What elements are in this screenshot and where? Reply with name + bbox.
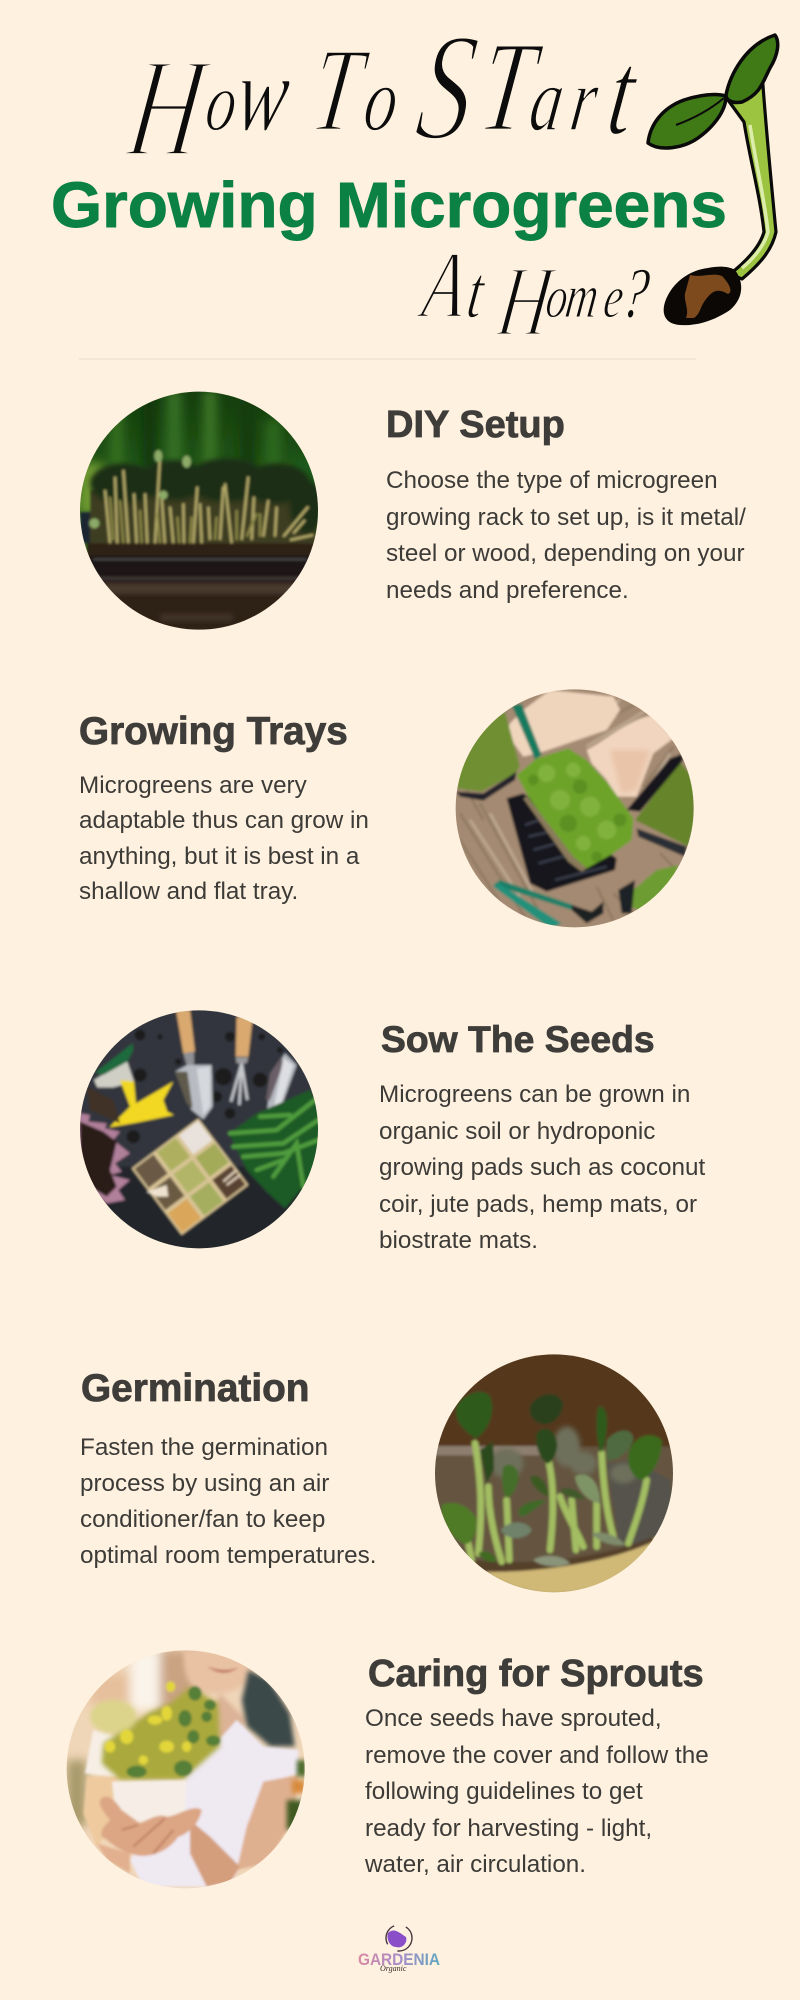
text: Caring for Sprouts body: water, air circulation. (365, 1851, 586, 1878)
title line: At Home?: e (600, 264, 628, 331)
text: Growing Trays body: Microgreens are very (79, 772, 307, 799)
text: Sow The Seeds body: organic soil or hydroponic (379, 1118, 655, 1145)
photo: microgreens in tray (80, 392, 318, 630)
text: Germination body: optimal room temperatures. (80, 1542, 377, 1569)
photo: garden tools and seeds (80, 1010, 318, 1248)
text: Germination body: process by using an air (80, 1470, 329, 1497)
text: Germination body (80, 1434, 377, 1569)
text: DIY Setup body: Choose the type of microgreen (386, 467, 718, 494)
text: Sow The Seeds body: coir, jute pads, hemp mats, or (379, 1191, 697, 1218)
heading: Caring for Sprouts: Caring for Sprouts (368, 1653, 704, 1695)
seed (664, 267, 741, 325)
title line: How To Start: T (304, 23, 375, 156)
logo icon (386, 1925, 412, 1951)
heading: Germination: Germination (81, 1367, 310, 1410)
title line: At Home?: o (542, 264, 573, 331)
text: Growing Trays body: anything, but it is best in a (79, 843, 359, 870)
title line: How To Start: S (408, 2, 486, 172)
title line: How To Start: w (230, 35, 297, 154)
photo: sunflower sprouts (435, 1354, 673, 1592)
text: Germination body: conditioner/fan to keep (80, 1506, 325, 1533)
photo: woman holding potted plant (66, 1650, 305, 1888)
heading: Sow The Seeds: Sow The Seeds (381, 1018, 655, 1060)
text: Germination body: Fasten the germination (80, 1434, 328, 1461)
text: Growing Trays body (79, 772, 369, 905)
title line: At Home?: A (413, 232, 474, 339)
logo tagline: Organic (380, 1964, 407, 1973)
text: DIY Setup body (386, 467, 746, 604)
title line: At Home?: t (463, 252, 490, 334)
title line: How To Start: o (358, 50, 405, 151)
lower leaf (648, 95, 726, 148)
text: Growing Trays body: adaptable thus can grow in (79, 807, 369, 834)
panel: Caring for Sprouts (66, 1650, 709, 1888)
title (51, 2, 780, 358)
text: Caring for Sprouts body: following guidelines to get (365, 1778, 643, 1805)
upper leaf (726, 35, 778, 103)
logo: Gardenia Organic (358, 1925, 440, 1973)
text: Sow The Seeds body: growing pads such as coconut (379, 1154, 705, 1181)
title line: At Home?: ? (617, 253, 654, 333)
text: DIY Setup body: needs and preference. (386, 577, 629, 604)
title line: At Home?: m (562, 262, 603, 331)
photo: hands lifting microgreen mat (456, 689, 694, 928)
text: Caring for Sprouts body: ready for harvesting - light, (365, 1815, 652, 1842)
title line: Growing Microgreens: Growing Microgreens (51, 169, 727, 241)
title line: How To Start: a (524, 50, 571, 151)
text: Growing Trays body: shallow and flat tray. (79, 878, 298, 905)
panel: Sow The Seeds (80, 1010, 706, 1254)
panel: Germination (80, 1354, 673, 1592)
heading: DIY Setup: DIY Setup (386, 404, 565, 446)
title line: How To Start: T (472, 15, 549, 159)
title line: How To Start: o (201, 55, 243, 148)
icon: sprout (648, 35, 778, 325)
text: DIY Setup body: steel or wood, depending on your (386, 540, 745, 567)
text: DIY Setup body: growing rack to set up, is it metal/ (386, 504, 746, 531)
text: Sow The Seeds body: Microgreens can be grown in (379, 1081, 690, 1108)
title line: How To Start: r (565, 50, 605, 151)
heading: Growing Trays: Growing Trays (79, 710, 348, 753)
text: Caring for Sprouts body: remove the cover and follow the (365, 1742, 709, 1769)
title line: How To Start: H (118, 29, 219, 186)
text: Caring for Sprouts body: Once seeds have sprouted, (365, 1705, 662, 1732)
divider (79, 358, 696, 360)
logo wordmark: GARDENIA (358, 1950, 440, 1969)
panel: Growing Trays (79, 689, 694, 928)
text: Caring for Sprouts body (365, 1705, 709, 1878)
text: Sow The Seeds body (379, 1081, 706, 1254)
sprout stem (728, 72, 776, 279)
title line: How To Start: t (601, 27, 646, 160)
panel: DIY Setup (80, 392, 746, 630)
title line: At Home?: H (491, 247, 562, 358)
text: Sow The Seeds body: biostrate mats. (379, 1227, 538, 1254)
